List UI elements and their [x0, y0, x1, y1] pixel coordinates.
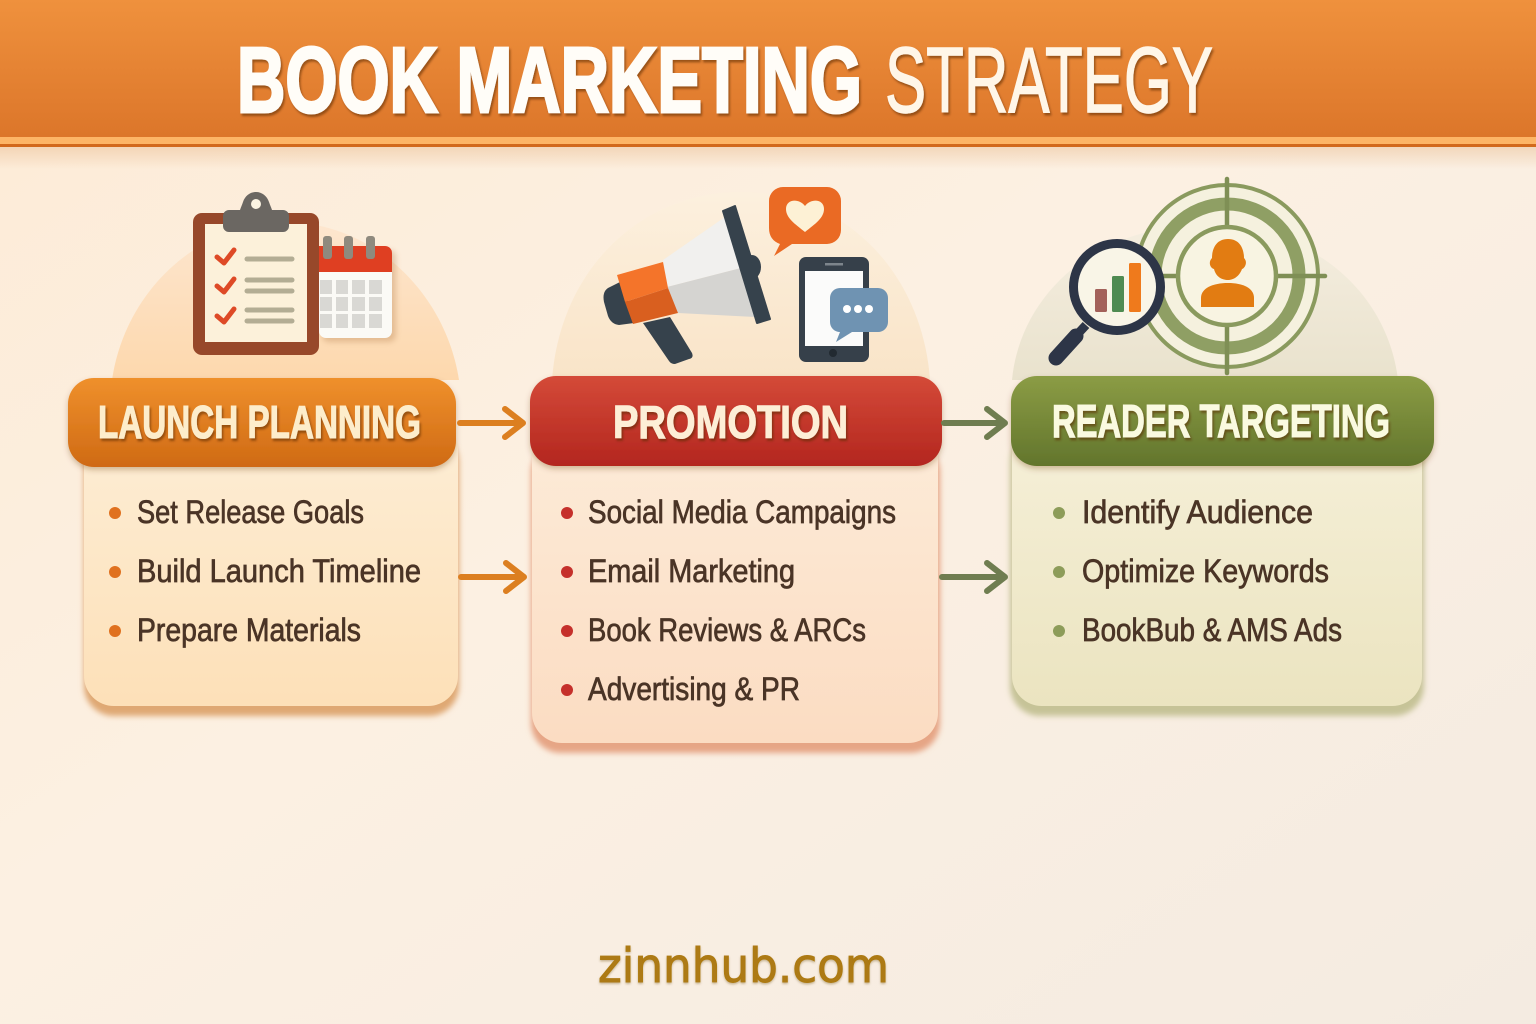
- icon: megaphone with speech bubbles: [604, 187, 888, 364]
- title: BOOK MARKETING: [237, 28, 862, 132]
- list: reader targeting: BookBub & AMS Ads: [1082, 612, 1342, 648]
- list: reader targeting: Optimize Keywords: [1082, 553, 1329, 589]
- list: promotion: [561, 494, 896, 707]
- panel: promotion: [530, 187, 942, 753]
- body card: reader targeting: [1010, 420, 1424, 716]
- list: launch planning: Set Release Goals: [137, 494, 364, 530]
- footer website: zinnhub.com: [598, 939, 889, 994]
- title: STRATEGY: [885, 28, 1213, 132]
- arrow: launch to promotion, bottom: [461, 563, 524, 591]
- arrow: launch to promotion, top: [460, 409, 523, 437]
- list: launch planning: [109, 494, 421, 648]
- list: promotion: Book Reviews & ARCs: [588, 612, 866, 648]
- title banner: [0, 0, 1536, 147]
- icon: clipboard and calendar: [193, 192, 396, 355]
- panel: reader targeting: [1010, 179, 1434, 716]
- dome backdrop: promotion: [552, 192, 930, 380]
- icon: target and magnifier: [1056, 179, 1325, 373]
- header: launch planning: LAUNCH PLANNING: [98, 396, 421, 448]
- body card: promotion: [531, 420, 940, 753]
- header: reader targeting: READER TARGETING: [1052, 395, 1390, 447]
- list: launch planning: Build Launch Timeline: [137, 553, 421, 589]
- list: reader targeting: Identify Audience: [1082, 494, 1313, 530]
- list: promotion: Email Marketing: [588, 553, 795, 589]
- header: promotion: [530, 376, 942, 466]
- dome backdrop: launch planning: [112, 222, 459, 380]
- list: reader targeting: [1053, 494, 1342, 648]
- arrow: promotion to targeting, bottom: [942, 563, 1005, 591]
- dome backdrop: reader targeting: [1012, 225, 1398, 380]
- header: reader targeting: [1011, 376, 1434, 466]
- list: promotion: Social Media Campaigns: [588, 494, 896, 530]
- list: promotion: Advertising & PR: [588, 671, 800, 707]
- arrow: promotion to targeting, top: [944, 409, 1005, 437]
- header: promotion: PROMOTION: [613, 396, 848, 448]
- body card: launch planning: [84, 420, 459, 716]
- header: launch planning: [68, 378, 456, 467]
- list: launch planning: Prepare Materials: [137, 612, 361, 648]
- panel: launch planning: [68, 192, 459, 716]
